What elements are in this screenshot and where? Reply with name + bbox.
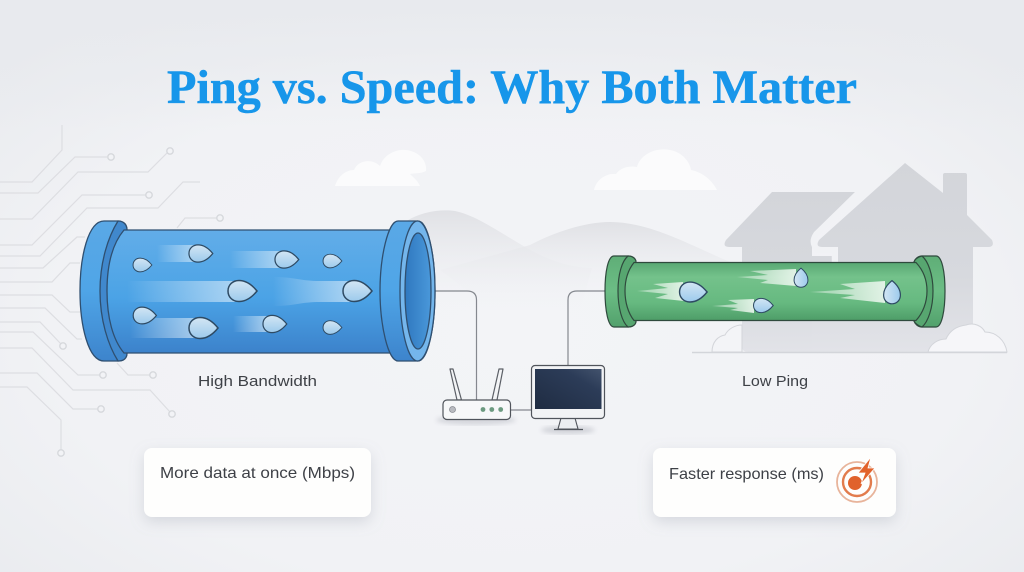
pipe body xyxy=(107,230,398,353)
icon: router xyxy=(436,369,516,425)
icon: target with lightning bolt xyxy=(837,457,877,502)
label: high bandwidth: High Bandwidth xyxy=(198,373,317,390)
clouds background xyxy=(335,149,717,190)
right flange xyxy=(914,256,945,327)
icon: computer monitor xyxy=(532,366,604,434)
water droplets xyxy=(680,268,900,313)
circuit traces decoration xyxy=(0,125,223,456)
label: low ping: Low Ping xyxy=(742,373,808,390)
right flange with opening xyxy=(380,221,435,361)
pipe body xyxy=(625,262,927,320)
data flow streaks xyxy=(127,245,350,338)
water droplets xyxy=(133,245,372,338)
card text: Faster response (ms) xyxy=(669,466,824,483)
title: Ping vs. Speed: Why Both Matter xyxy=(167,61,857,114)
left flange xyxy=(80,221,127,361)
small clouds and ground line xyxy=(692,324,1007,352)
green pipe: low ping xyxy=(605,256,945,327)
card: more data xyxy=(144,448,371,517)
connection cables xyxy=(435,291,606,410)
card text: More data at once (Mbps) xyxy=(160,465,355,482)
house silhouette xyxy=(725,163,993,352)
card: faster response xyxy=(653,448,896,517)
speed streaks xyxy=(637,269,885,313)
blue pipe: high bandwidth xyxy=(80,221,435,361)
left flange xyxy=(605,256,636,327)
hills xyxy=(405,210,740,310)
